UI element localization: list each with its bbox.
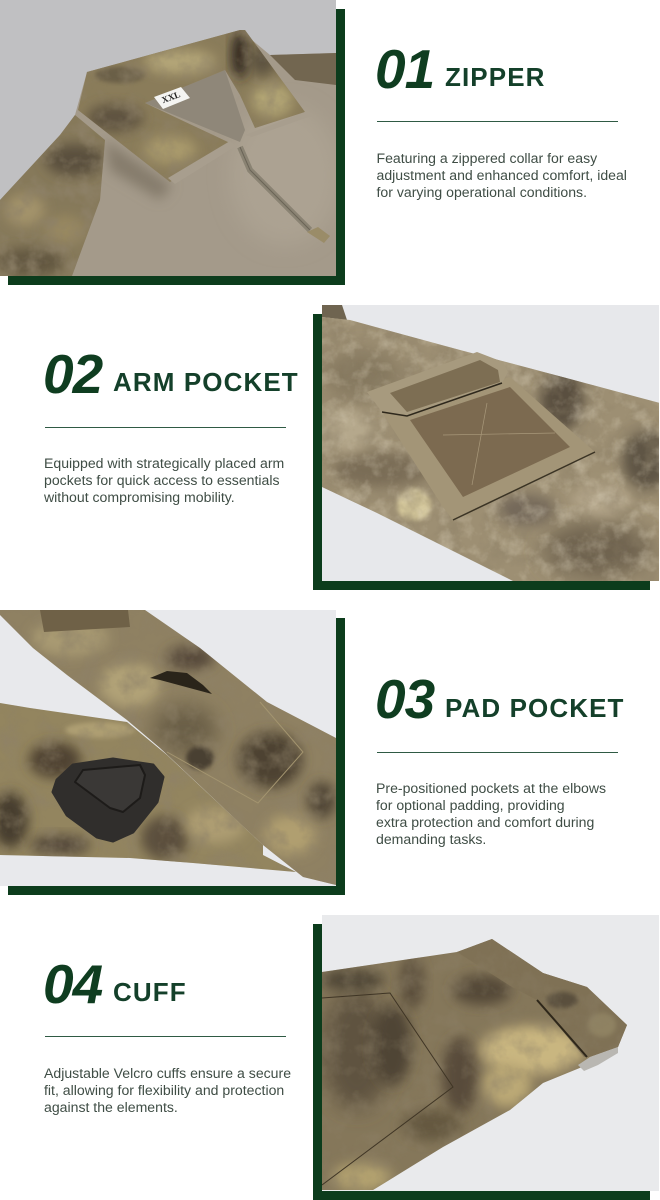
top fabric scrap xyxy=(322,305,347,320)
description: cuff: against the elements. xyxy=(44,1099,178,1115)
elbow pad xyxy=(53,759,163,841)
heading: 04 cuff xyxy=(43,953,187,1015)
number 04: 04 xyxy=(43,953,102,1015)
photo: arm pocket xyxy=(322,305,659,581)
size label xyxy=(154,87,190,109)
description: zipper: for varying operational conditions. xyxy=(376,184,587,200)
frame bar bottom xyxy=(313,581,650,590)
cuff band xyxy=(457,939,627,1057)
pocket flap velcro xyxy=(40,610,130,632)
frame bar bottom xyxy=(8,886,345,895)
camo shoulder xyxy=(270,53,336,85)
frame bar bottom xyxy=(8,276,345,285)
description: pad pocket: demanding tasks. xyxy=(376,831,486,847)
photo frame: arm pocket xyxy=(313,314,650,590)
panel: pad pocket feature xyxy=(0,610,625,895)
photo frame: cuff xyxy=(313,924,650,1200)
photo frame: pad pocket xyxy=(8,618,345,895)
shadow under cuff xyxy=(578,1047,618,1071)
description: arm pocket: Equipped with strategically placed arm xyxy=(44,455,284,471)
photo: pad pocket xyxy=(0,610,336,886)
shirt body fleece xyxy=(0,30,336,276)
panel: zipper feature xyxy=(0,0,627,285)
heading: 01 zipper xyxy=(375,38,546,100)
frame bar right xyxy=(336,9,345,285)
lower camo sleeve xyxy=(0,700,300,880)
description: zipper: Featuring a zippered collar for easy xyxy=(376,150,597,166)
photo: cuff xyxy=(322,915,659,1191)
description: arm pocket: pockets for quick access to essentials xyxy=(44,472,280,488)
shadow under collar flap xyxy=(105,140,172,200)
size label: XXL xyxy=(160,89,182,105)
heading: 02 arm pocket xyxy=(43,343,299,405)
number 03: 03 xyxy=(375,668,434,730)
frame bar bottom xyxy=(313,1191,650,1200)
description: cuff: fit, allowing for flexibility and protection xyxy=(44,1082,284,1098)
description: pad pocket xyxy=(376,780,606,847)
frame bar left xyxy=(313,924,322,1200)
title arm pocket: ARM POCKET xyxy=(113,367,299,397)
number 01: 01 xyxy=(375,38,434,100)
pocket seam xyxy=(322,993,453,1185)
camo collar xyxy=(78,30,305,182)
description: cuff: Adjustable Velcro cuffs ensure a secure xyxy=(44,1064,291,1080)
description: pad pocket: Pre-positioned pockets at the elbows xyxy=(376,780,606,796)
panel: arm pocket feature xyxy=(43,305,659,590)
description: pad pocket: for optional padding, providing xyxy=(376,797,565,813)
title zipper: ZIPPER xyxy=(445,62,546,92)
description: zipper xyxy=(376,150,627,200)
pocket xyxy=(367,352,595,520)
description: arm pocket xyxy=(44,455,284,505)
camo sleeve xyxy=(322,939,627,1190)
title cuff: CUFF xyxy=(113,977,187,1007)
upper camo sleeve xyxy=(0,610,336,886)
frame bar left xyxy=(313,314,322,590)
camo sleeve xyxy=(0,110,110,276)
number 02: 02 xyxy=(43,343,102,405)
description: zipper: adjustment and enhanced comfort, ideal xyxy=(376,167,627,183)
inner neck xyxy=(145,70,245,142)
description: pad pocket: extra protection and comfort during xyxy=(376,814,594,830)
panel: cuff feature xyxy=(43,915,659,1200)
title pad pocket: PAD POCKET xyxy=(445,693,625,723)
description: arm pocket: without compromising mobility. xyxy=(44,489,235,505)
camo sleeve xyxy=(319,305,660,581)
cuff fold line xyxy=(537,1000,587,1057)
photo: zippered collar xyxy=(0,0,336,276)
heading: 03 pad pocket xyxy=(375,668,625,730)
collar trim xyxy=(168,141,236,184)
pocket seam xyxy=(167,702,303,803)
zipper xyxy=(240,147,330,243)
description: cuff xyxy=(44,1064,291,1115)
pocket slot xyxy=(150,671,212,694)
photo frame: zipper xyxy=(8,9,345,285)
frame bar right xyxy=(336,618,345,895)
